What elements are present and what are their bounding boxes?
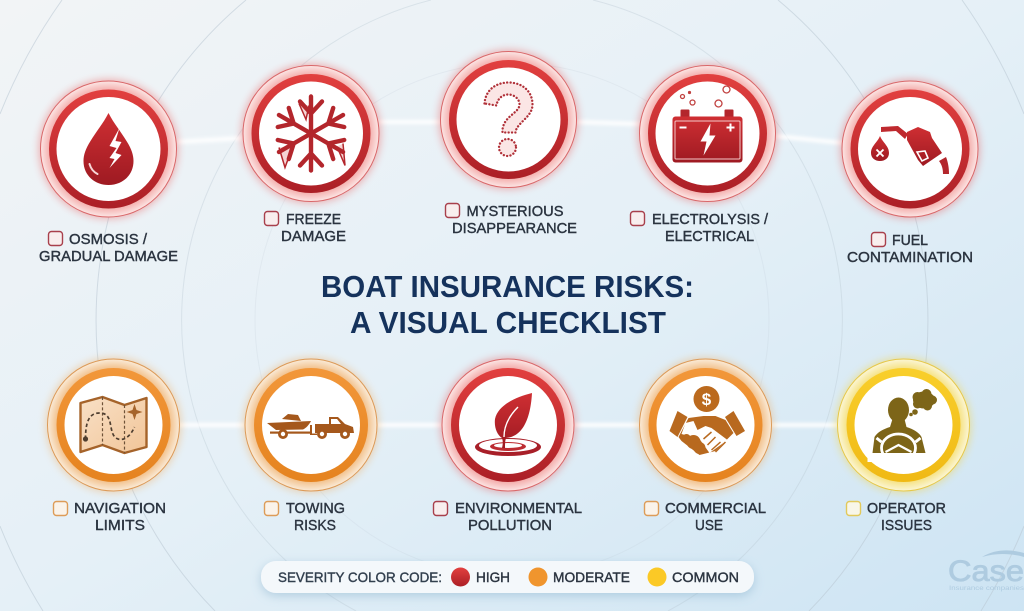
badge: osmosis xyxy=(38,79,178,219)
badge: navigation limits xyxy=(46,357,182,493)
label: fuel contamination: CONTAMINATION xyxy=(847,250,973,266)
item: operator issues xyxy=(836,357,972,534)
item: fuel contamination xyxy=(840,79,980,266)
label: mysterious disappearance: DISAPPEARANCE xyxy=(452,221,577,237)
legend: high xyxy=(451,568,510,586)
item: osmosis xyxy=(38,79,178,265)
label: freeze: FREEZE xyxy=(286,212,341,228)
badge: freeze xyxy=(241,64,381,204)
label: osmosis: GRADUAL DAMAGE xyxy=(39,249,178,265)
watermark logo: Insurance companies xyxy=(949,586,1024,592)
label: environmental pollution: POLLUTION xyxy=(468,518,552,534)
legend: moderate xyxy=(528,568,630,586)
label: fuel contamination xyxy=(847,232,973,266)
label: freeze xyxy=(264,212,346,245)
badge: electrolysis xyxy=(638,64,778,204)
label: electrolysis: ELECTRICAL xyxy=(665,229,754,245)
label: electrolysis: ELECTROLYSIS / xyxy=(652,212,769,228)
label: mysterious disappearance xyxy=(446,204,577,237)
label: operator issues xyxy=(846,501,946,534)
title: BOAT INSURANCE RISKS: xyxy=(321,269,694,304)
item: towing risks xyxy=(243,357,379,534)
label: towing risks xyxy=(264,501,345,534)
label: commercial use: USE xyxy=(695,518,723,534)
label: fuel contamination: FUEL xyxy=(892,233,928,249)
item: navigation limits xyxy=(46,357,182,534)
badge: environmental pollution xyxy=(440,357,576,493)
label: osmosis: OSMOSIS / xyxy=(69,232,148,248)
label: freeze: DAMAGE xyxy=(281,229,346,245)
badge: mysterious disappearance xyxy=(438,50,578,190)
item: environmental pollution xyxy=(434,357,582,534)
label: electrolysis xyxy=(630,212,769,245)
badge: operator issues xyxy=(836,357,972,493)
legend: severity color code: SEVERITY COLOR CODE: xyxy=(278,569,442,585)
legend: common xyxy=(648,568,739,586)
item: electrolysis xyxy=(630,64,778,245)
label: environmental pollution xyxy=(434,501,582,534)
label: navigation limits xyxy=(54,501,166,534)
item: freeze xyxy=(241,64,381,245)
title: A VISUAL CHECKLIST xyxy=(350,305,666,340)
item: mysterious disappearance xyxy=(438,50,578,237)
label: osmosis xyxy=(39,232,178,265)
item: commercial use xyxy=(638,357,774,534)
label: navigation limits: NAVIGATION xyxy=(74,501,166,517)
label: environmental pollution: ENVIRONMENTAL xyxy=(455,501,582,517)
label: operator issues: ISSUES xyxy=(881,518,932,534)
badge: commercial use: $ xyxy=(702,390,712,409)
label: towing risks: TOWING xyxy=(286,501,345,517)
legend: common: COMMON xyxy=(672,569,739,585)
label: commercial use xyxy=(644,501,766,534)
legend: moderate: MODERATE xyxy=(553,569,630,585)
label: commercial use: COMMERCIAL xyxy=(665,501,766,517)
badge: commercial use xyxy=(638,357,774,493)
watermark logo: Case xyxy=(948,555,1024,588)
label: operator issues: OPERATOR xyxy=(867,501,946,517)
legend: high: HIGH xyxy=(476,569,510,585)
label: towing risks: RISKS xyxy=(294,518,336,534)
glowing connector lines xyxy=(176,122,843,425)
label: navigation limits: LIMITS xyxy=(95,518,145,534)
label: mysterious disappearance: MYSTERIOUS xyxy=(466,204,564,220)
title xyxy=(321,269,694,340)
badge: fuel contamination xyxy=(840,79,980,219)
badge: towing risks xyxy=(243,357,379,493)
legend: severity color code xyxy=(261,561,754,593)
